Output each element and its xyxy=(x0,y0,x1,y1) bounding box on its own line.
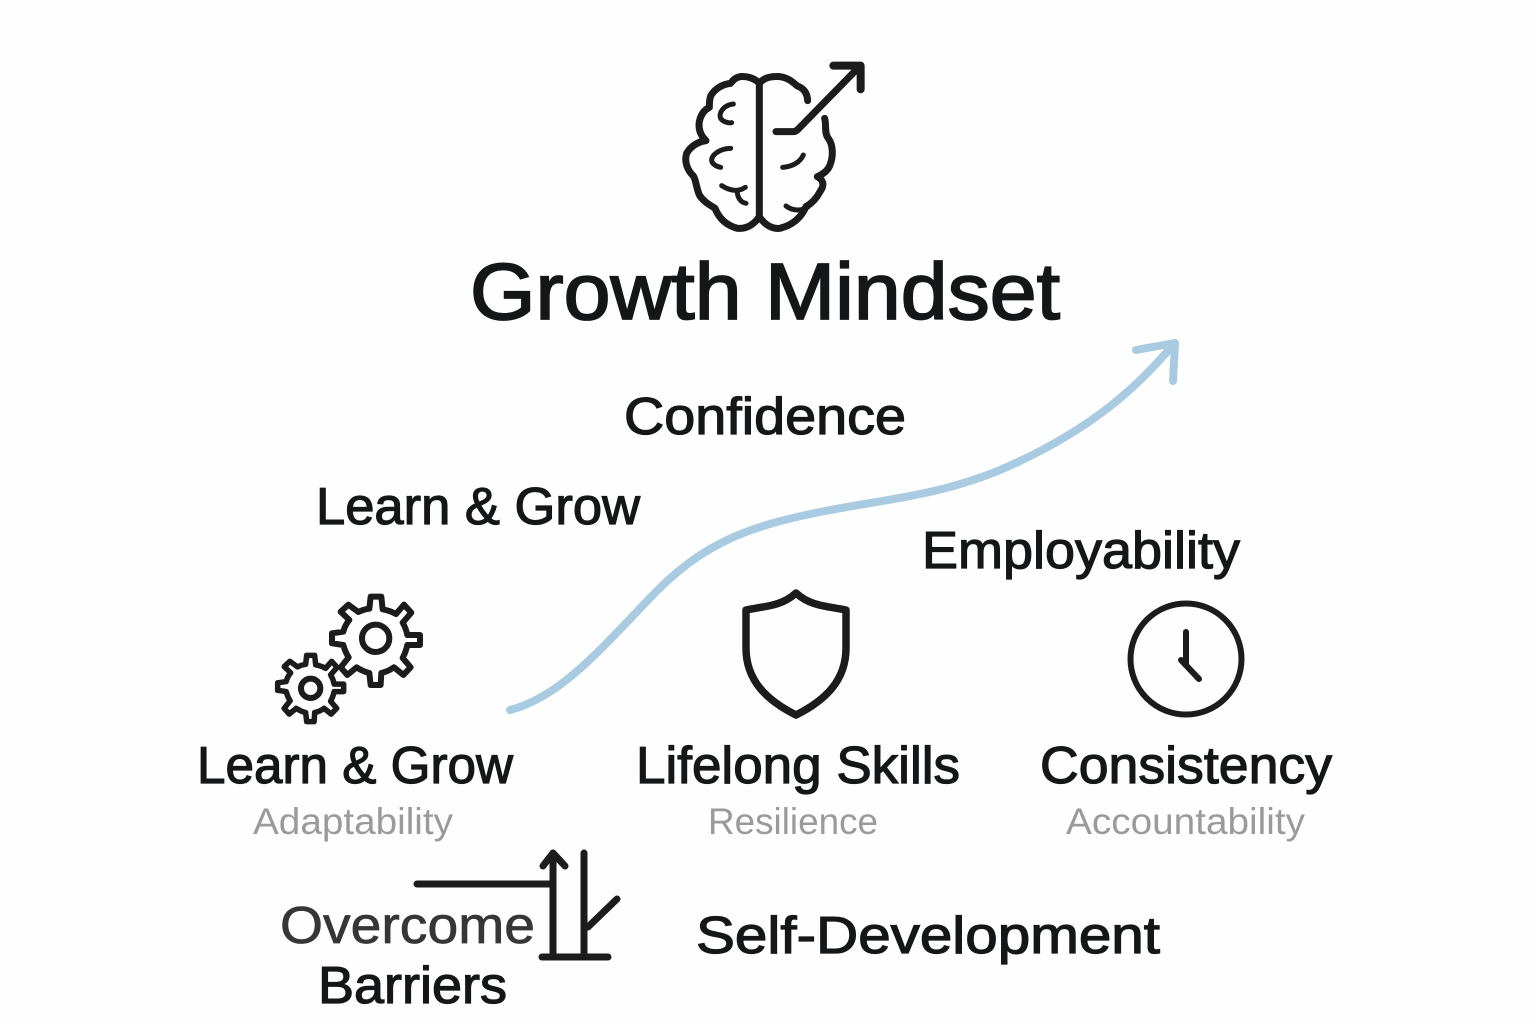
icon: gears xyxy=(278,597,420,722)
label: Consistency with Accountability: Accountability xyxy=(1066,801,1306,842)
icon: clock xyxy=(1130,604,1242,714)
label: Learn & Grow upper: Learn & Grow xyxy=(316,478,640,536)
label: Learn & Grow with Adaptability xyxy=(197,737,513,842)
label: Learn & Grow with Adaptability: Adaptability xyxy=(253,801,454,842)
title: Growth Mindset xyxy=(470,247,1060,336)
label: Consistency with Accountability xyxy=(1040,737,1332,842)
label: Learn & Grow with Adaptability: Learn & Grow xyxy=(197,737,513,795)
label: Consistency with Accountability: Consistency xyxy=(1040,737,1332,795)
icon: barrier with arrow xyxy=(417,853,617,957)
label: Lifelong Skills with Resilience xyxy=(636,737,960,842)
growth arrow curve xyxy=(510,343,1175,710)
label: Lifelong Skills with Resilience: Lifelong Skills xyxy=(636,737,960,795)
icon: shield xyxy=(746,593,846,715)
icon: brain with rising arrow xyxy=(686,66,861,228)
label: Employability: Employability xyxy=(922,522,1240,580)
label: Confidence: Confidence xyxy=(624,388,906,446)
label: Self-Development: Self-Development xyxy=(696,907,1161,965)
label: Overcome Barriers xyxy=(280,897,535,1015)
label: Lifelong Skills with Resilience: Resilience xyxy=(708,801,878,842)
label: Overcome Barriers: Overcome xyxy=(280,897,535,955)
label: Overcome Barriers: Barriers xyxy=(318,957,507,1015)
brain folds xyxy=(712,104,808,210)
brain arrow xyxy=(776,66,861,132)
